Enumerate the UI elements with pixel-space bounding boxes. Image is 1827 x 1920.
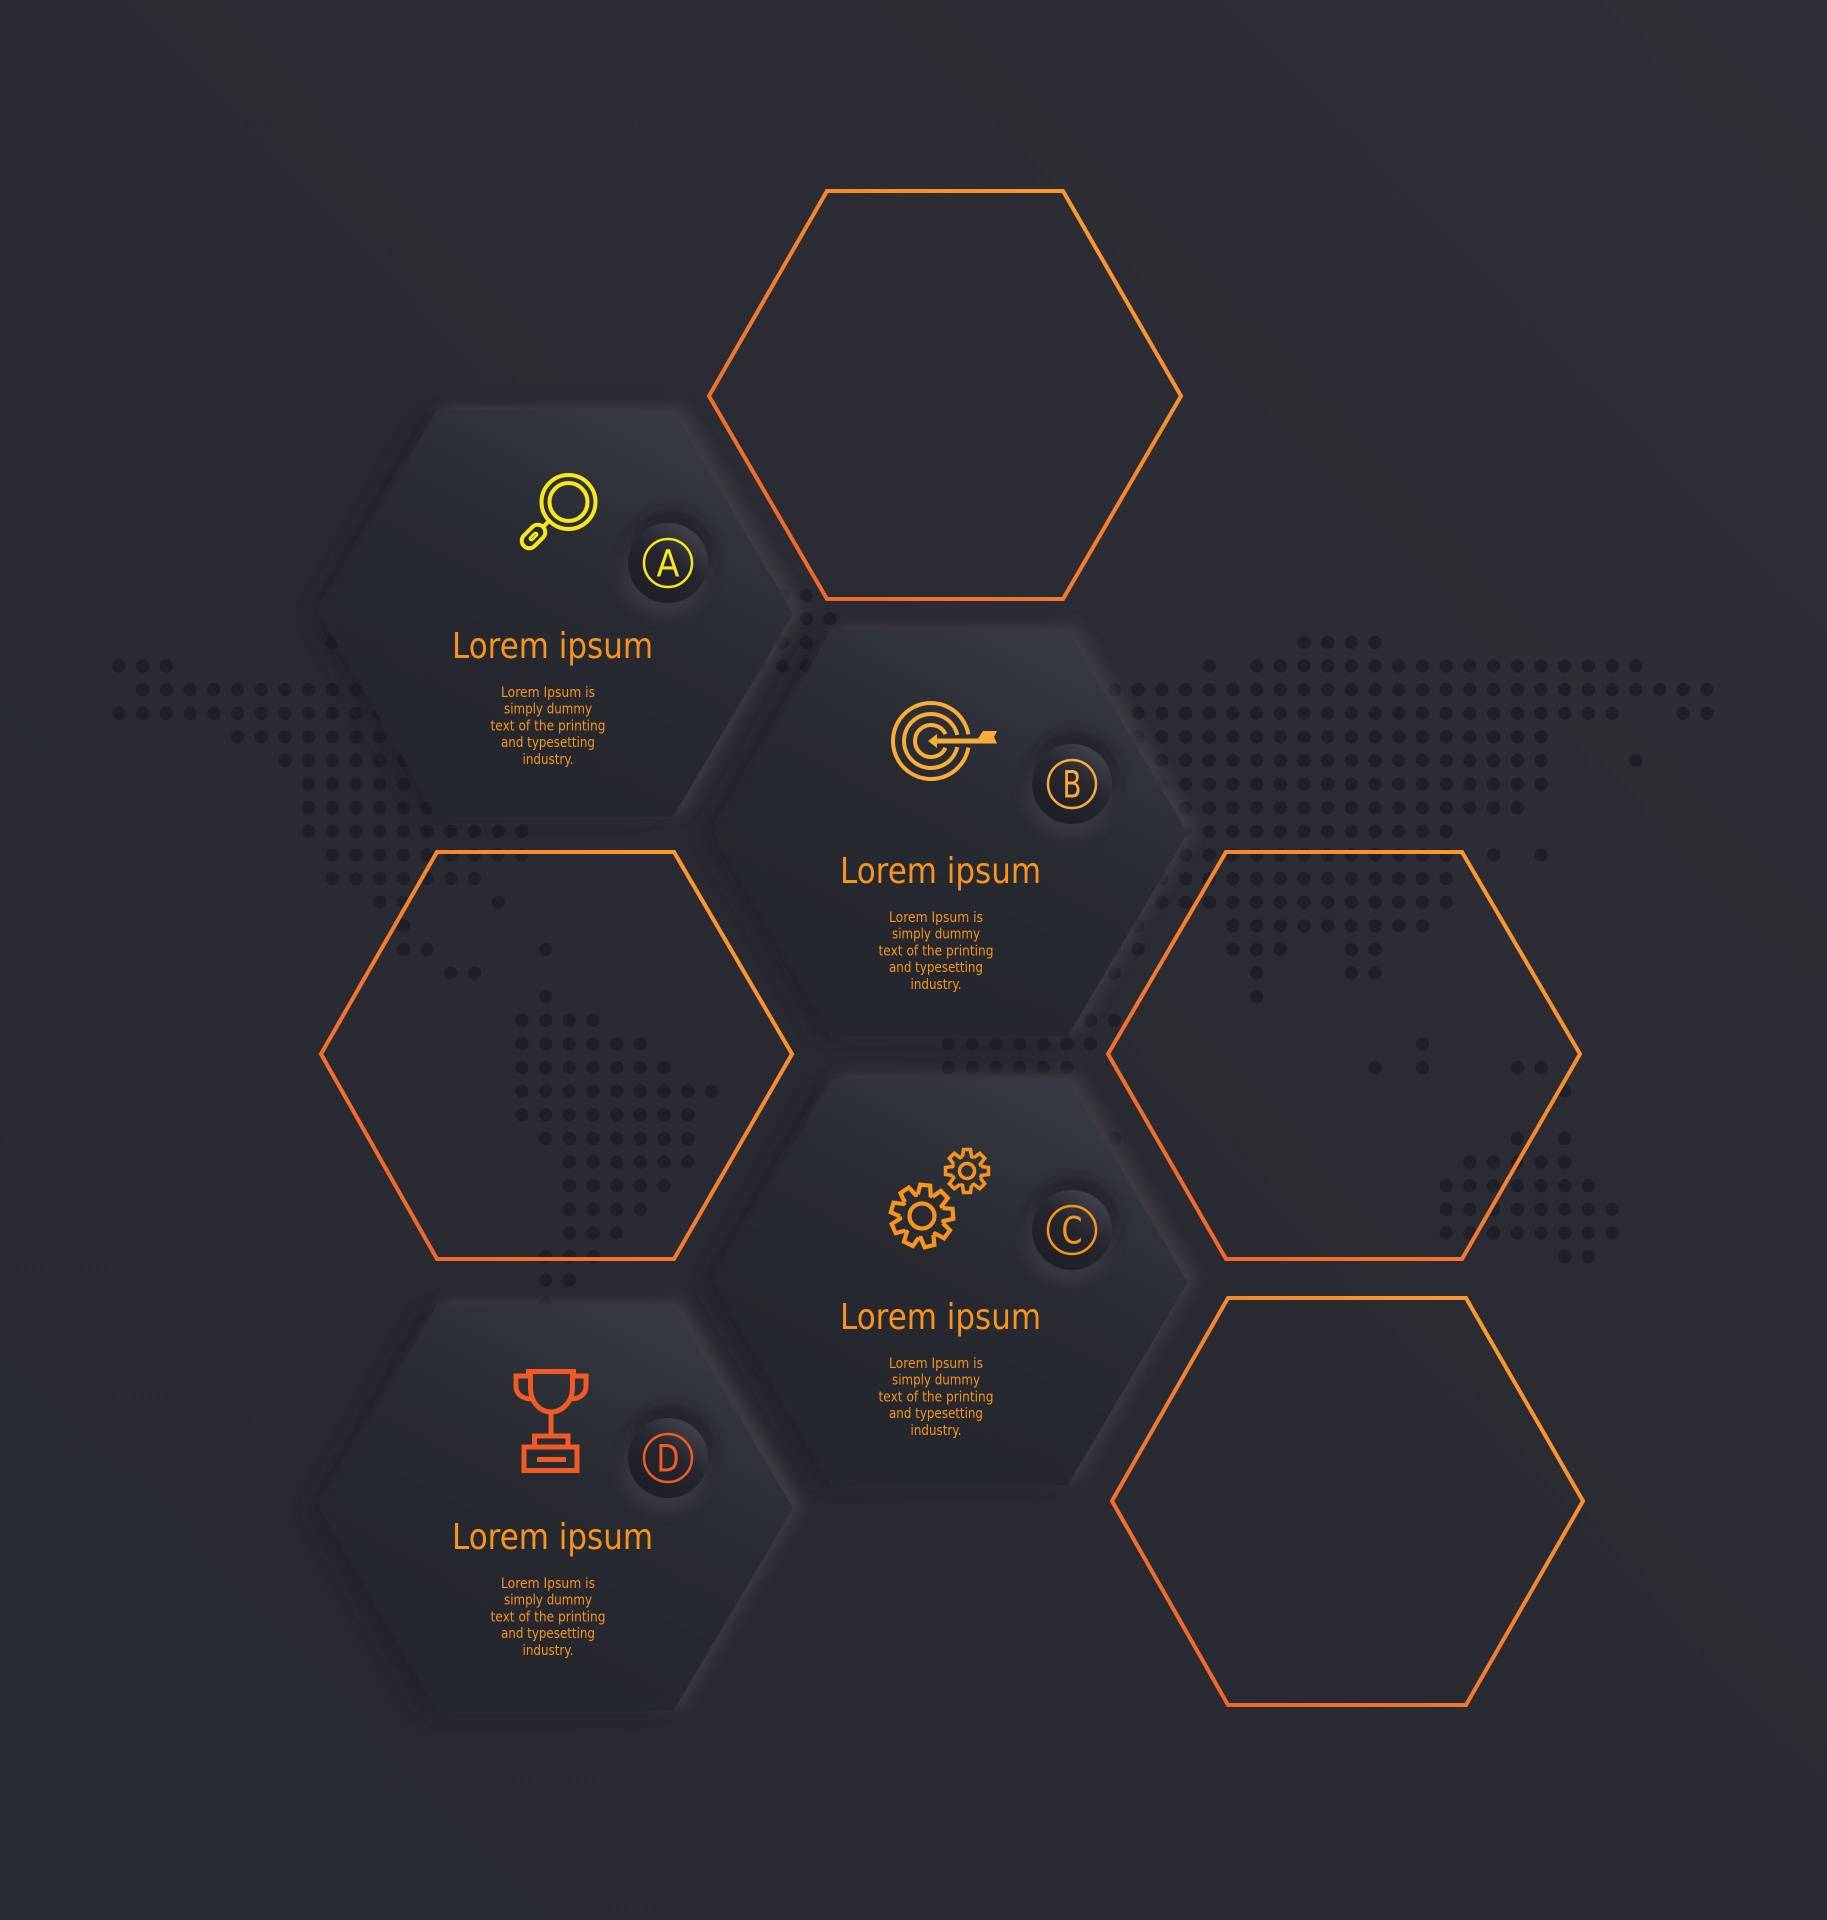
text block C: industry.	[910, 1423, 962, 1439]
text block B: industry.	[910, 977, 962, 993]
text block D: Lorem Ipsum is	[501, 1576, 595, 1592]
outline hexagon: left	[321, 852, 792, 1259]
text block C	[878, 1356, 994, 1439]
outline hexagon: top	[709, 191, 1181, 599]
text block A	[490, 685, 606, 768]
panel: B	[698, 626, 1196, 1040]
heading A: Lorem ipsum	[452, 626, 653, 667]
text block D: simply dummy	[504, 1593, 592, 1609]
text block A: industry.	[522, 752, 574, 768]
badge B	[1026, 731, 1118, 837]
text block D: industry.	[522, 1643, 574, 1659]
badge A: A	[656, 542, 680, 586]
text block D: and typesetting	[501, 1626, 595, 1642]
panel: A	[304, 406, 802, 820]
hexagon plate D	[304, 1300, 802, 1714]
text block A: Lorem Ipsum is	[501, 685, 595, 701]
outline hexagon: right	[1108, 852, 1580, 1259]
text block B: Lorem Ipsum is	[889, 910, 983, 926]
badge C: C	[1062, 1210, 1082, 1252]
icon: gears	[887, 1150, 988, 1251]
heading D: Lorem ipsum	[452, 1517, 653, 1558]
badge B: B	[1062, 764, 1082, 806]
badge A	[622, 510, 714, 616]
text block B: and typesetting	[889, 960, 983, 976]
panel: D	[304, 1300, 802, 1714]
hexagon plate A	[304, 406, 802, 820]
icon: target with arrow	[893, 703, 997, 779]
hexagon plate B	[698, 626, 1196, 1040]
text block A: simply dummy	[504, 702, 592, 718]
heading B: Lorem ipsum	[840, 851, 1041, 892]
outline hexagon: bottom right	[1112, 1298, 1583, 1705]
text block C: and typesetting	[889, 1406, 983, 1422]
text block B: text of the printing	[878, 943, 994, 959]
text block B	[878, 910, 994, 993]
text block C: simply dummy	[892, 1373, 980, 1389]
text block C: text of the printing	[878, 1389, 994, 1405]
text block A: and typesetting	[501, 735, 595, 751]
text block D: text of the printing	[490, 1609, 606, 1625]
text block A: text of the printing	[490, 718, 606, 734]
dotted world map	[119, 595, 1707, 1304]
badge D	[622, 1405, 714, 1511]
badge D: D	[656, 1438, 680, 1480]
panel: C	[698, 1074, 1196, 1488]
badge C	[1026, 1177, 1118, 1283]
icon: magnifying glass	[519, 475, 596, 551]
hexagon plate C	[698, 1074, 1196, 1488]
heading C: Lorem ipsum	[840, 1297, 1041, 1338]
text block B: simply dummy	[892, 927, 980, 943]
icon: trophy	[516, 1372, 586, 1470]
text block D	[490, 1576, 606, 1659]
text block C: Lorem Ipsum is	[889, 1356, 983, 1372]
